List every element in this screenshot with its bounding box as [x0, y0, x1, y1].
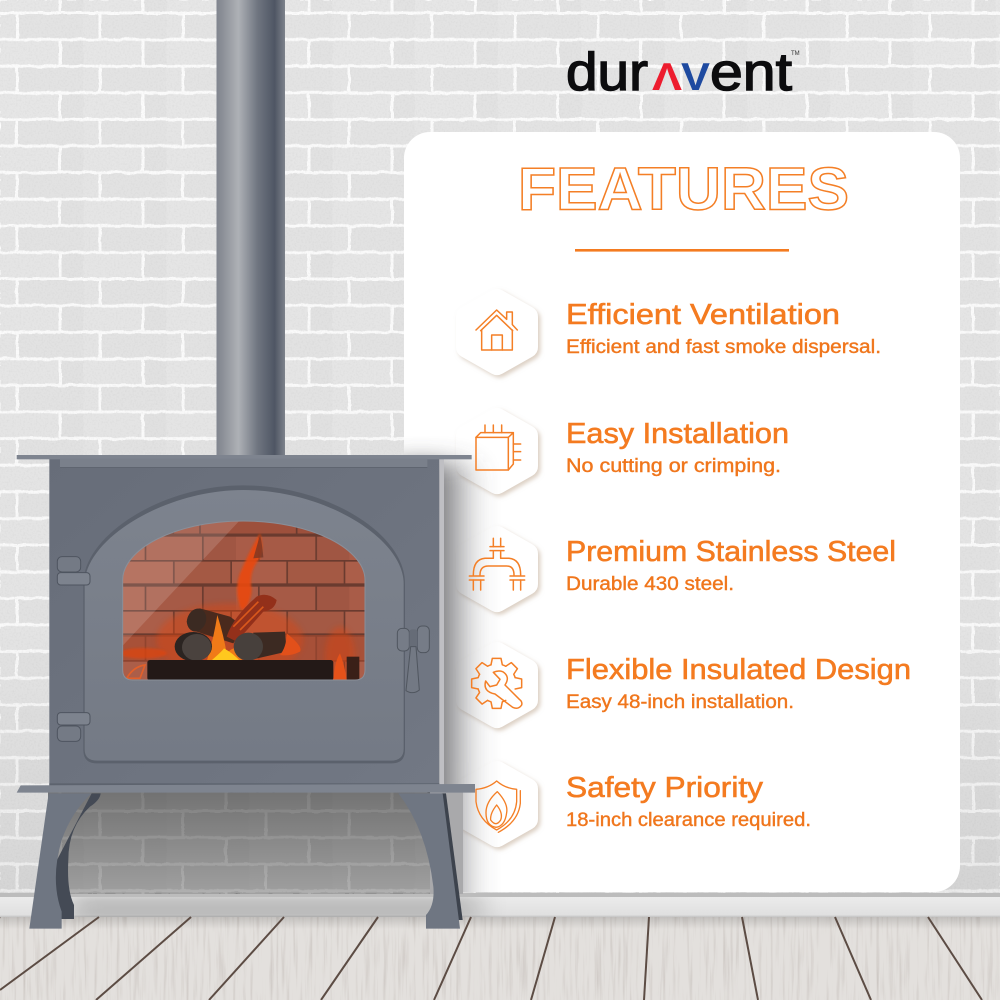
- right flame lick: [280, 633, 301, 655]
- stove left leg: [29, 793, 101, 929]
- wood plank floor: [0, 917, 1000, 1000]
- logo: duravent: V: [681, 56, 710, 99]
- feature 3 text: Premium Stainless Steel: [566, 536, 896, 568]
- feature 1 text: Efficient and fast smoke dispersal.: [566, 337, 881, 358]
- heading: FEATURES: FEATURES: [518, 156, 849, 222]
- feature 2 text: No cutting or crimping.: [566, 456, 781, 477]
- door handle: [397, 626, 429, 693]
- feature 3 text: [566, 536, 896, 595]
- stove right leg: [398, 793, 463, 929]
- upper hinge: [57, 557, 90, 585]
- stove body: [49, 458, 439, 788]
- flame plume: [237, 533, 262, 610]
- lower hinge: [57, 713, 90, 741]
- icon: gear and wrench: [472, 658, 522, 708]
- icon: stainless pipe: [469, 538, 525, 590]
- baseboard: [0, 893, 1000, 919]
- logo: duravent: dur: [566, 43, 648, 102]
- feature 2 text: [566, 418, 789, 477]
- logo: duravent: [566, 43, 800, 102]
- burning stick: [227, 595, 277, 642]
- wall seen beneath stove: [48, 792, 463, 894]
- stove bottom plate: [17, 783, 475, 793]
- wood stove: [17, 455, 475, 929]
- flue pipe: [216, 0, 285, 458]
- stove door: [83, 485, 405, 763]
- glass reflection: [120, 518, 242, 645]
- logo: duravent: Λ: [652, 56, 682, 99]
- door window with fire: [120, 518, 368, 687]
- icon: flame shield: [476, 781, 520, 832]
- icon: flashing panel: [476, 425, 521, 470]
- feature 1 text: Efficient Ventilation: [566, 299, 840, 331]
- heading underline: [575, 249, 789, 252]
- stove shadow on panel: [385, 462, 457, 932]
- base log: [147, 660, 333, 681]
- feature 5 text: [566, 772, 811, 831]
- stove side highlight: [439, 458, 444, 788]
- feature 4 text: Flexible Insulated Design: [566, 654, 911, 686]
- panel: features card: [404, 132, 960, 892]
- stove top plate: [17, 455, 472, 468]
- feature 5 text: Safety Priority: [566, 772, 764, 804]
- feature 1 text: [566, 299, 881, 358]
- feature 4 text: [566, 654, 911, 713]
- window edge: [123, 521, 365, 680]
- feature 3 text: Durable 430 steel.: [566, 574, 734, 595]
- icon: house: [476, 310, 517, 350]
- logo: duravent: TM: [791, 51, 800, 57]
- hexagon icon backgrounds: [467, 300, 527, 836]
- logo: duravent: ent: [710, 43, 792, 102]
- feature 5 text: 18-inch clearance required.: [566, 810, 811, 831]
- tilted top log: [186, 608, 235, 644]
- feature 4 text: Easy 48-inch installation.: [566, 692, 794, 713]
- feature 2 text: Easy Installation: [566, 418, 789, 450]
- flames glow: [155, 602, 305, 660]
- round logs: [253, 632, 286, 659]
- central flames: [207, 615, 242, 662]
